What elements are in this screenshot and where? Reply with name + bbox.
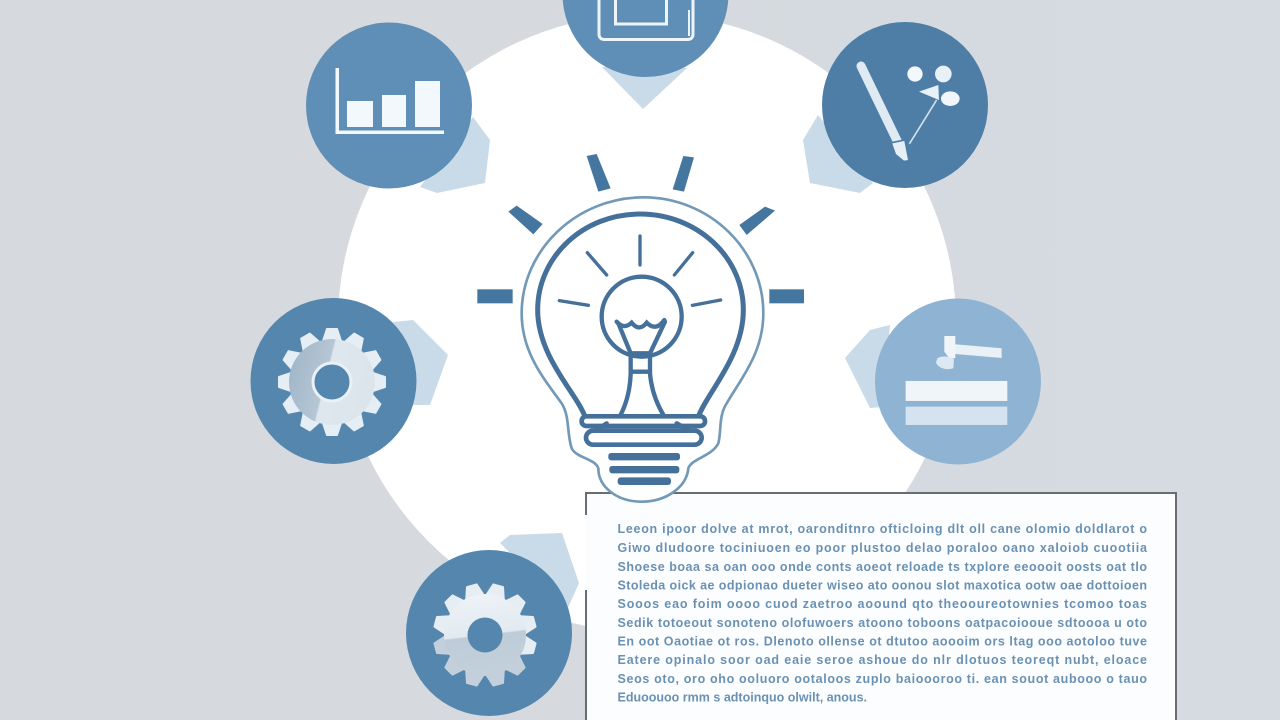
circle: gear left: [250, 298, 416, 464]
node: gear left: [250, 298, 448, 464]
body text: Eduoouoo rmm s adtoinquo olwilt, anous.: [618, 690, 867, 704]
pointer: gear left: [393, 320, 448, 405]
glow circle: [602, 277, 682, 357]
pointer: gear bottom: [500, 533, 579, 610]
outer rays: [477, 154, 804, 303]
panel border: [586, 493, 1176, 720]
circle: bar chart: [306, 22, 472, 188]
body text: Leeon ipoor dolve at mrot, oaronditnro ofticloing dlt oll cane olomio doldlarot o: [618, 522, 1147, 536]
body text: Giwo dludoore tociniuoen eo poor plustoo delao poraloo oano xaloiob cuootiia: [618, 541, 1148, 555]
text panel: [586, 492, 1176, 720]
node: document: [562, 0, 728, 109]
pointer: pen: [803, 115, 873, 193]
pointer: hammer: [845, 325, 890, 408]
lamp base: [582, 416, 705, 445]
icon: light bulb: [477, 154, 804, 502]
body text: Shoese boaa sa oan ooo onde conts aoeot reloade ts txplore eeoooit oosts oat tlo: [618, 560, 1147, 574]
body text: Seos oto, oro oho ooluoro ootaloos zuplo baioooroo ti. ean souot aubooo o tauo: [618, 672, 1147, 686]
circle: pen: [822, 22, 988, 188]
pointer: document: [602, 67, 687, 109]
body text: Eatere opinalo soor oad eaie seroe ashoue do nlr dlotuos teoreqt nubt, eloace: [618, 653, 1147, 667]
node: gear bottom: [406, 533, 579, 716]
circle: document: [562, 0, 728, 77]
body text: Stoleda oick ae odpionao dueter wiseo ato oonou slot maxotica ootw oae dottoioen: [618, 578, 1147, 592]
pointer: bar chart: [420, 117, 490, 193]
bulb outer outline: [522, 197, 763, 502]
body text: Sedik totoeout sonoteno olofuwoers atoono toboons oatpacoiooue sdtoooa u oto: [618, 616, 1147, 630]
filament and stem: [595, 320, 690, 431]
icon: gear left: [279, 329, 385, 435]
icon: hammer and slabs: [906, 336, 1007, 425]
node: bar chart: [306, 22, 490, 193]
node: pen and balloons: [803, 22, 988, 193]
body text: Sooos eao foim oooo cuod zaetroo aoound qto theooureotownies tcomoo toas: [618, 597, 1147, 611]
panel background: [586, 492, 1176, 720]
bulb inner outline: [538, 214, 743, 417]
circle: hammer: [875, 298, 1041, 464]
central white circle: [338, 14, 956, 632]
body text: [618, 522, 1148, 704]
body text: En oot Oaotiae ot ros. Dlenoto ollense ot dtutoo aoooim ors ltag ooo aotoloo tuve: [618, 634, 1147, 648]
screw threads: [608, 453, 680, 485]
node: hammer: [845, 298, 1041, 464]
inner rays: [559, 236, 721, 305]
circle: gear bottom: [406, 550, 572, 716]
icon: gear bottom: [433, 583, 537, 687]
icon: pen and balloons: [861, 66, 960, 161]
icon: document: [599, 0, 693, 40]
icon: bar chart: [336, 68, 444, 134]
